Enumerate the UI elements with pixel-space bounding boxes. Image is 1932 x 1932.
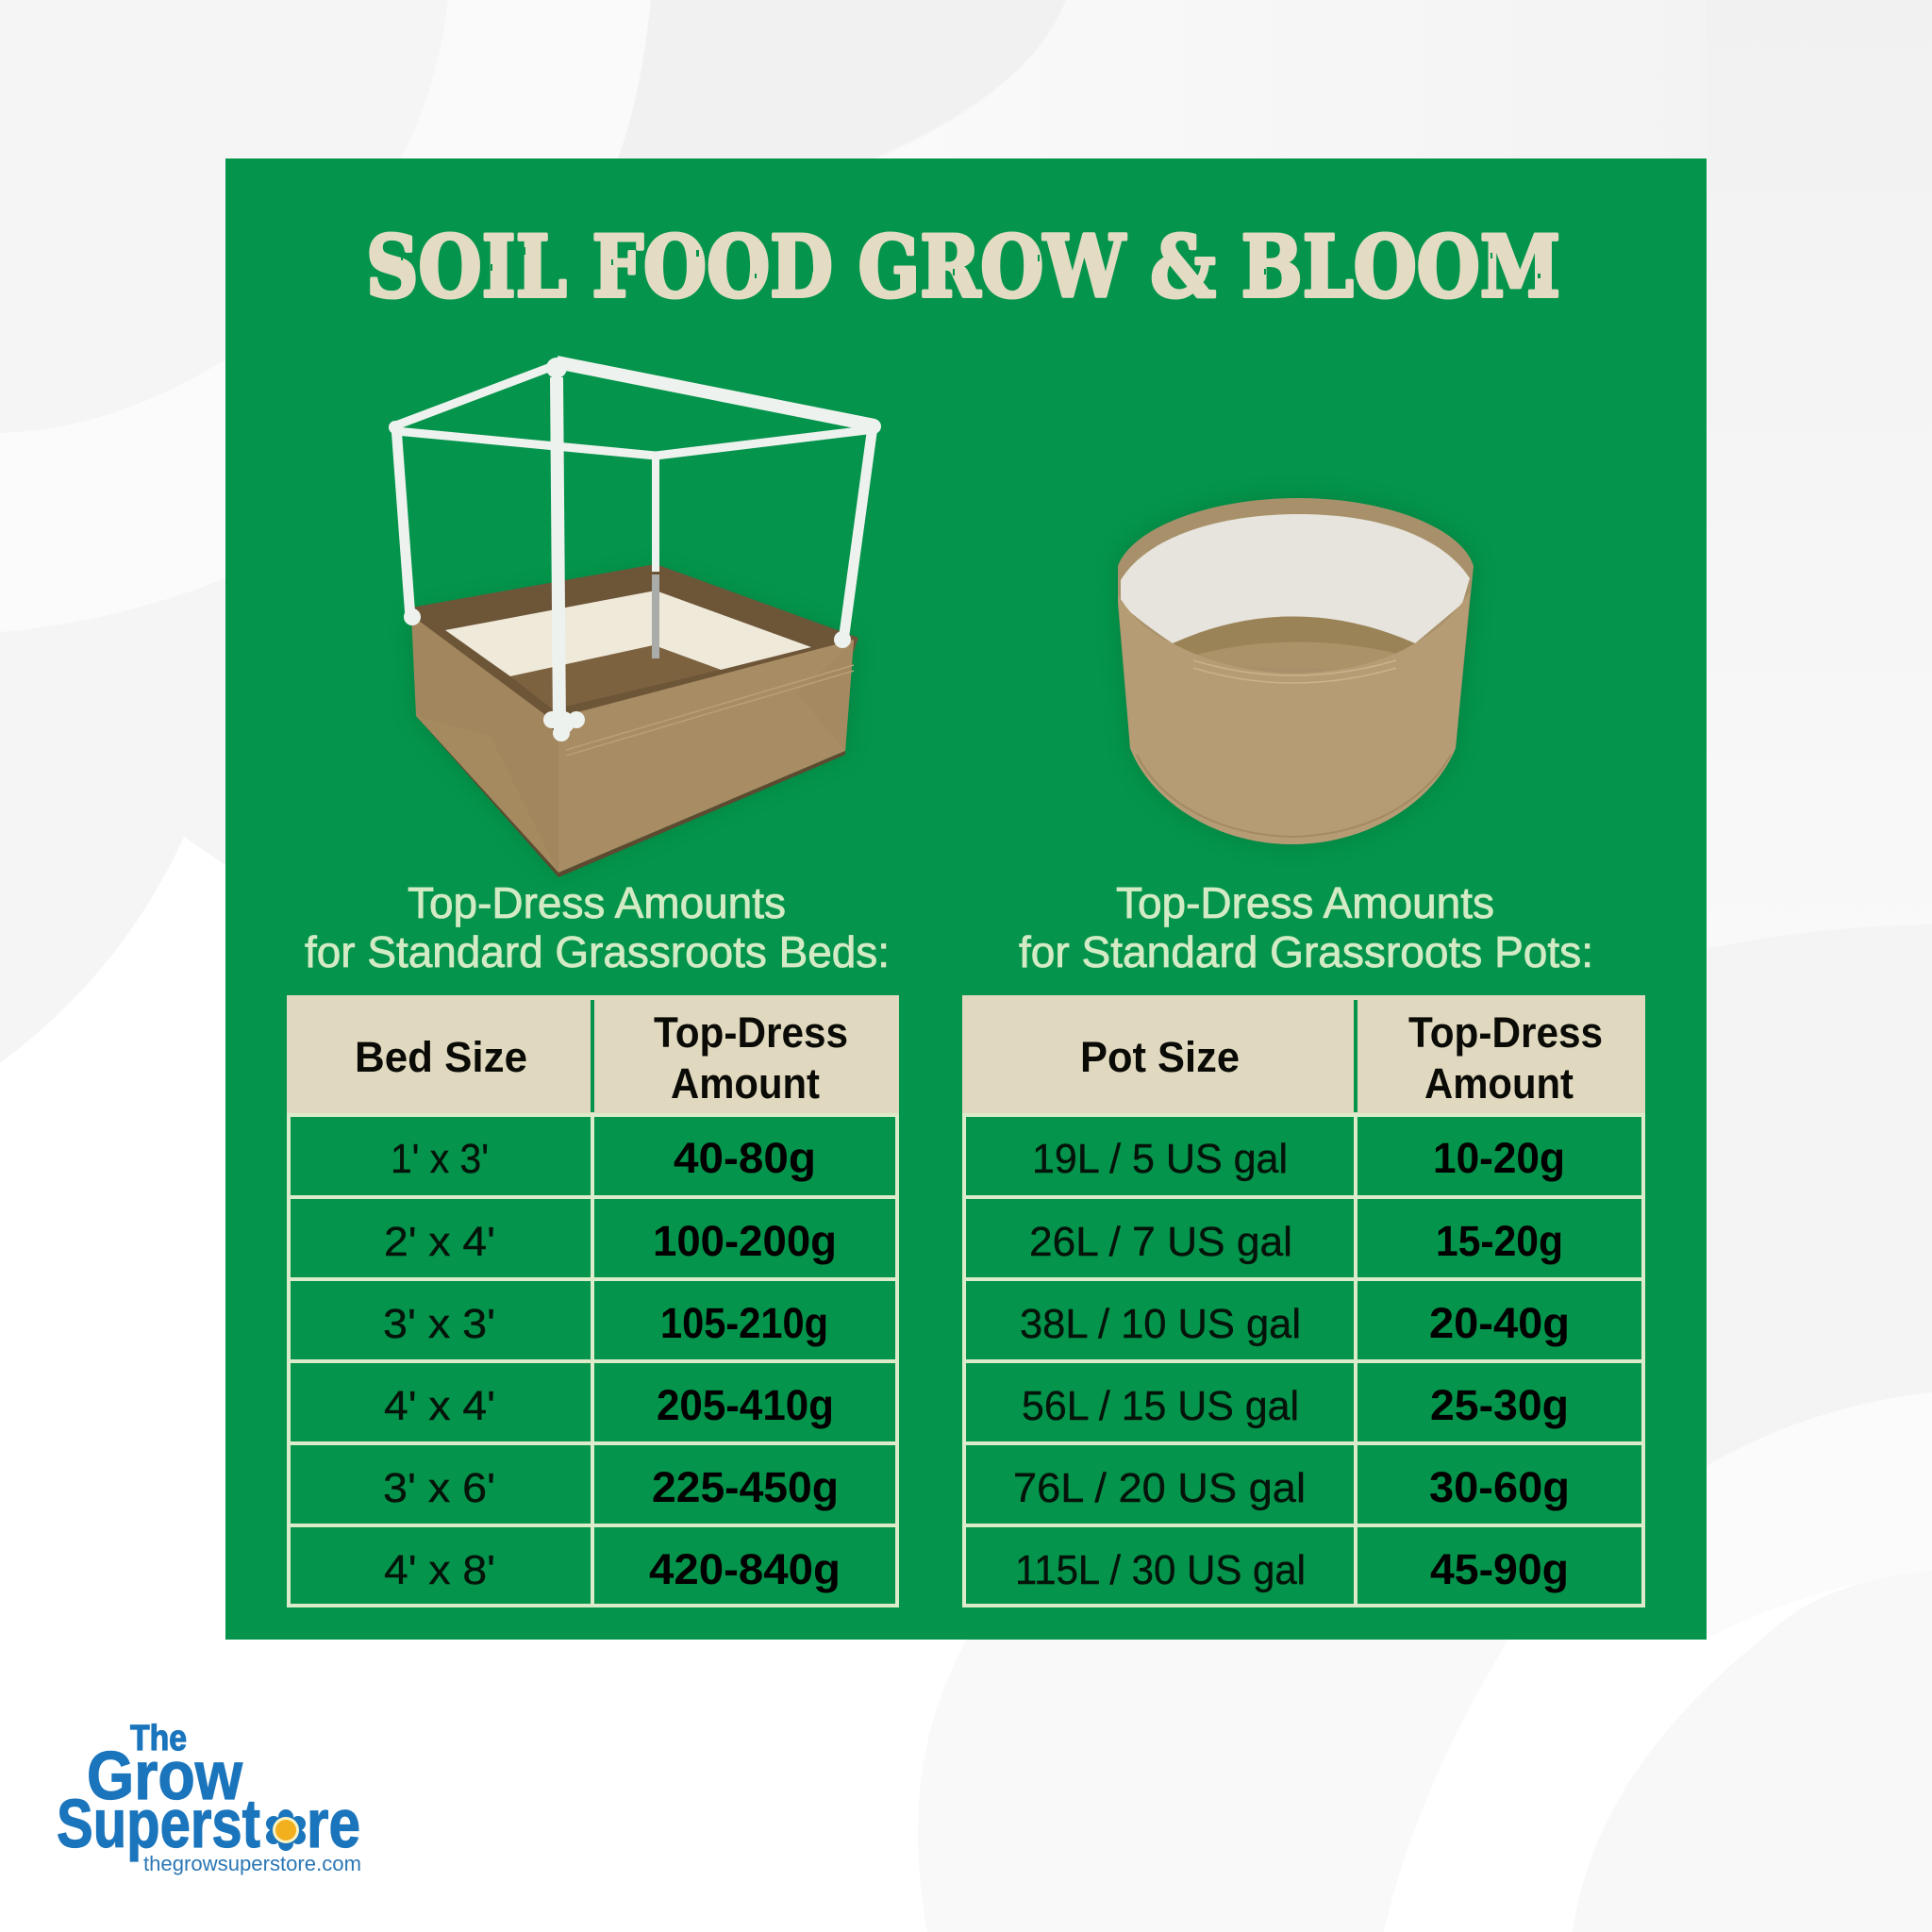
logo: The Grow Superstore: The (130, 1719, 187, 1758)
table: bed sizes: 420-840g (649, 1545, 841, 1593)
table: pot sizes: 10-20g (1433, 1134, 1565, 1182)
logo: The Grow Superstore: thegrowsuperstore.com (143, 1852, 361, 1875)
panel folds (416, 716, 558, 873)
table: bed sizes: Bed Size (355, 1033, 527, 1081)
pot base seam (1137, 755, 1451, 837)
pot stitching (1193, 660, 1396, 683)
table: bed sizes: Top-Dress (654, 1008, 848, 1057)
subheading: pots: for Standard Grassroots Pots: (1019, 927, 1593, 976)
stitching (566, 665, 854, 756)
logo: The Grow Superstore (57, 1719, 361, 1875)
subheading: pots: Top-Dress Amounts (1116, 878, 1494, 927)
table: pot sizes: Amount (1424, 1059, 1574, 1108)
table: pot sizes: 38L / 10 US gal (1020, 1301, 1301, 1347)
subheading: beds: for Standard Grassroots Beds: (305, 927, 890, 976)
bed floor (510, 645, 721, 709)
table: pot sizes: 20-40g (1429, 1299, 1570, 1347)
table: pot sizes: 26L / 7 US gal (1029, 1219, 1292, 1265)
title: SOIL FOOD GROW & BLOOM (366, 217, 1560, 317)
table: bed sizes: 205-410g (657, 1381, 834, 1429)
logo: The Grow Superstore: re (307, 1787, 360, 1862)
table: pot sizes: 56L / 15 US gal (1022, 1383, 1299, 1429)
table: pot sizes (962, 995, 1645, 1607)
pvc frame (393, 362, 874, 726)
icon: flower (266, 1809, 306, 1851)
table: bed sizes: 4' x 8' (384, 1547, 495, 1593)
left panel (411, 615, 558, 873)
table: pot sizes: 30-60g (1429, 1463, 1570, 1511)
frame corner joints (389, 358, 881, 648)
table: bed sizes: 2' x 4' (384, 1219, 495, 1265)
corner fitting (543, 711, 585, 741)
table: pot sizes: 76L / 20 US gal (1013, 1465, 1306, 1511)
table: bed sizes: 225-450g (652, 1463, 839, 1511)
back rim of bed (406, 564, 858, 745)
green panel (225, 158, 1707, 1640)
table: bed sizes: 40-80g (674, 1134, 816, 1182)
table: bed sizes: 1' x 3' (391, 1136, 489, 1182)
subheading: pots (1019, 878, 1593, 976)
logo: The Grow Superstore: Grow (87, 1739, 243, 1814)
table: pot sizes: 15-20g (1436, 1217, 1563, 1265)
product photo: grow bed with frame (389, 358, 881, 877)
logo: The Grow Superstore: Superst (57, 1787, 260, 1862)
table: bed sizes: 4' x 4' (384, 1383, 495, 1429)
subheading: beds: Top-Dress Amounts (408, 878, 786, 927)
product photo: grow pot (1118, 498, 1474, 844)
pot front body (1118, 592, 1470, 844)
pot outer silhouette (1118, 498, 1474, 844)
table: bed sizes: 100-200g (653, 1217, 837, 1265)
pot floor (1196, 641, 1396, 670)
table: pot sizes: Pot Size (1080, 1033, 1240, 1081)
table: pot sizes: 115L / 30 US gal (1015, 1547, 1306, 1593)
table: bed sizes (287, 995, 899, 1607)
table: bed sizes: Amount (671, 1059, 820, 1108)
table: bed sizes: 105-210g (660, 1299, 828, 1347)
table: pot sizes: 45-90g (1430, 1545, 1569, 1593)
white liner (445, 591, 811, 676)
table: bed sizes: 3' x 6' (383, 1465, 495, 1511)
right panel (558, 640, 854, 873)
table: pot sizes: 19L / 5 US gal (1032, 1136, 1288, 1182)
white pot liner (1121, 514, 1470, 643)
table: bed sizes: 3' x 3' (383, 1301, 495, 1347)
table: pot sizes: 25-30g (1430, 1381, 1569, 1429)
back inner post (652, 575, 659, 658)
bottom edge (416, 716, 845, 877)
subheading: beds (305, 878, 890, 976)
pot inner wall (1173, 617, 1415, 660)
table: pot sizes: Top-Dress (1408, 1008, 1603, 1057)
